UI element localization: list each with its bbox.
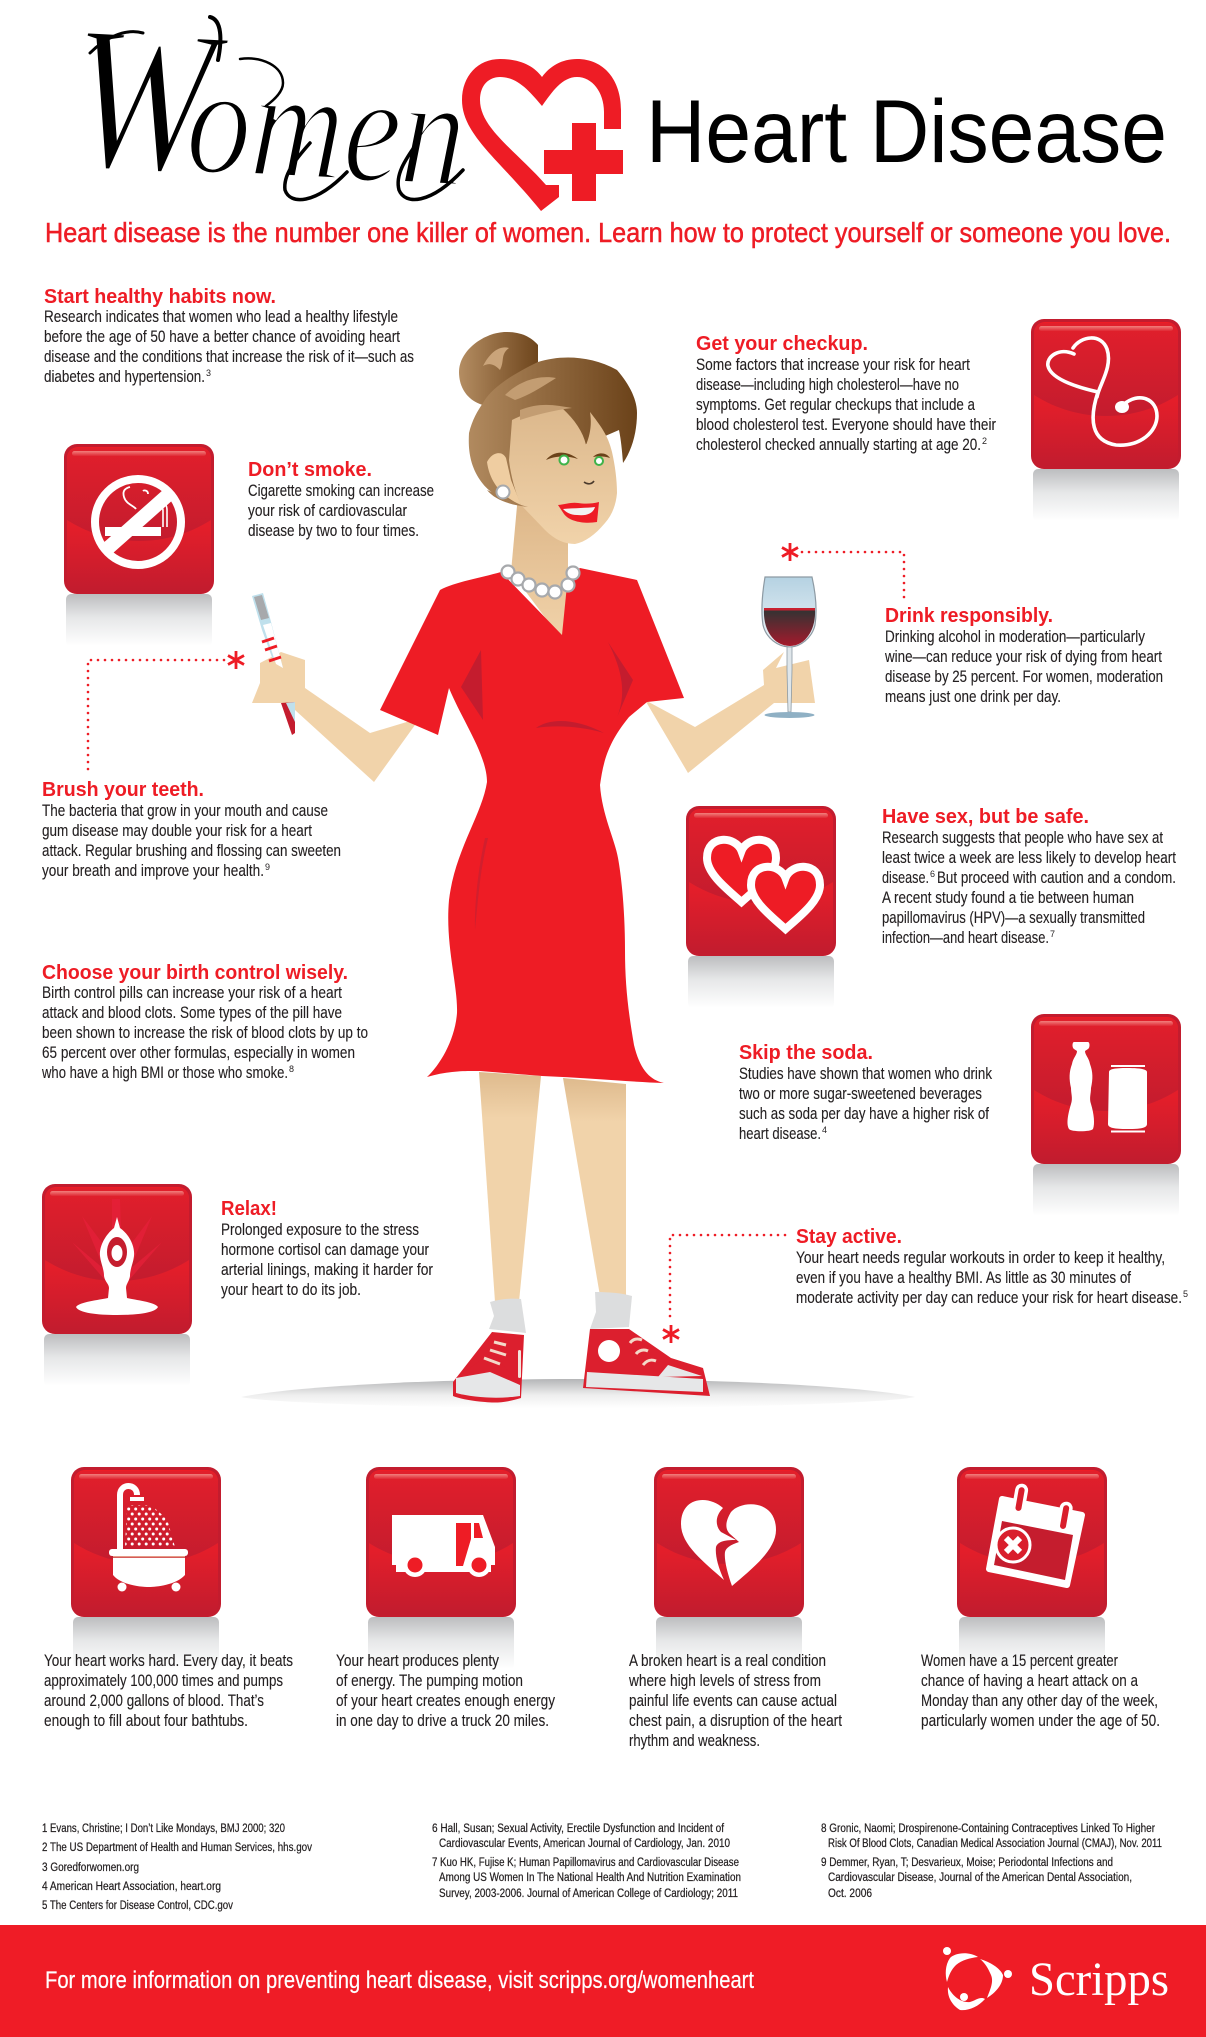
right arm and hand: [645, 652, 815, 773]
text block: relax: [221, 1198, 433, 1299]
text block: birth control: 8: [289, 1064, 294, 1074]
text block: birth control: [41, 962, 368, 1082]
fact: truck energy: [336, 1652, 556, 1730]
hair side lock: [487, 490, 528, 507]
text block: skip the soda: Skip the soda.: [739, 1042, 873, 1064]
nose: [584, 481, 594, 484]
left leg: [479, 1072, 541, 1302]
hair back: [469, 357, 637, 505]
text block: have sex: infection—and heart disease.: [882, 929, 1049, 947]
text block: drink responsibly: [884, 605, 1163, 706]
references: column 2: [432, 1823, 741, 1900]
text block: get your checkup: Get your checkup.: [696, 333, 868, 355]
text block: get your checkup: cholesterol checked annually starting at age 20.: [696, 436, 981, 454]
icon: no smoking: [64, 444, 214, 646]
fact: monday: particularly women under the age of 50.: [921, 1712, 1160, 1730]
text block: relax: Prolonged exposure to the stress: [221, 1221, 419, 1239]
fact: broken heart: where high levels of stress from: [628, 1672, 821, 1690]
toothbrush: [252, 593, 295, 735]
right leg: [563, 1078, 626, 1296]
fact: truck energy: Your heart produces plenty: [336, 1652, 500, 1670]
references: column 2: 7 Kuo HK, Fujise K; Human Papillomavirus and Cardiovascular Disease: [432, 1857, 739, 1869]
text block: get your checkup: disease—including high cholesterol—have no: [696, 376, 959, 394]
icon: delivery truck: [366, 1467, 516, 1669]
text block: brush your teeth: gum disease may double your risk for a heart: [42, 822, 312, 840]
text block: stay active: 5: [1183, 1289, 1188, 1299]
text block: get your checkup: [696, 333, 996, 454]
fact: broken heart: rhythm and weakness.: [629, 1732, 760, 1750]
text block: stay active: Stay active.: [796, 1226, 902, 1248]
references: column 1: 1 Evans, Christine; I Don’t Like Mondays, BMJ 2000; 320: [42, 1823, 285, 1835]
text block: have sex: disease.: [882, 869, 929, 887]
logo wordmark: Scripps: Scripps: [1029, 1953, 1169, 2006]
text block: relax: hormone cortisol can damage your: [221, 1241, 429, 1259]
text block: birth control: Choose your birth control wisely.: [42, 962, 348, 984]
left arm and hand: [252, 652, 420, 782]
text block: birth control: Birth control pills can increase your risk of a heart: [42, 984, 342, 1002]
icon: meditation: [42, 1184, 192, 1386]
fact: broken heart: painful life events can cause actual: [629, 1692, 837, 1710]
text block: dont smoke: Cigarette smoking can increase: [248, 482, 434, 500]
decorative swashes on script word: [90, 17, 463, 200]
text block: have sex: [882, 806, 1176, 947]
text block: brush your teeth: Brush your teeth.: [42, 779, 204, 801]
text block: start healthy habits: Start healthy habits now.: [44, 286, 276, 308]
text block: birth control: attack and blood clots. Some types of the pill have: [42, 1004, 342, 1022]
text block: dont smoke: your risk of cardiovascular: [248, 502, 407, 520]
text block: dont smoke: [248, 459, 434, 540]
right sock: [590, 1292, 632, 1329]
references: column 1: 3 Goredforwomen.org: [42, 1862, 139, 1874]
references: column 2: Among US Women In The National Health And Nutrition Examination: [439, 1872, 741, 1884]
text block: have sex: 6: [930, 869, 935, 879]
hair bun: [459, 332, 538, 406]
fact: broken heart: chest pain, a disruption of the heart: [629, 1712, 842, 1730]
icon: broken heart: [654, 1467, 804, 1669]
fact: truck energy: in one day to drive a truck 20 miles.: [336, 1712, 549, 1730]
text block: brush your teeth: The bacteria that grow in your mouth and cause: [42, 802, 328, 820]
references: column 2: Survey, 2003-2006. Journal of American College of Cardiology; 2011: [439, 1888, 738, 1900]
fact: bathtubs: around 2,000 gallons of blood. That’s: [44, 1692, 264, 1710]
title words: Heart Disease: Heart Disease: [646, 81, 1167, 181]
dress: [380, 568, 684, 1083]
text block: relax: arterial linings, making it harder for: [221, 1261, 433, 1279]
icon: two hearts: [686, 806, 836, 1008]
fact: bathtubs: enough to fill about four bathtubs.: [44, 1712, 248, 1730]
text block: get your checkup: blood cholesterol test. Everyone should have their: [696, 416, 996, 434]
text block: start healthy habits: 3: [206, 368, 211, 378]
callout connector: stay active: [663, 1235, 785, 1343]
icon: heart and cross logo: [462, 59, 623, 211]
text block: dont smoke: Don’t smoke.: [248, 459, 372, 481]
left shoe: [453, 1332, 524, 1403]
icon: shower and bathtub: [71, 1467, 221, 1669]
face: [509, 408, 617, 544]
neck: [511, 495, 568, 640]
fact: truck energy: of your heart creates enough energy: [336, 1692, 556, 1710]
necklace: [502, 566, 580, 598]
logo mark: Scripps: [943, 1947, 1012, 2010]
right shoe: [583, 1329, 710, 1396]
references: column 3: [821, 1823, 1162, 1900]
icon: soda bottle and can: [1031, 1014, 1181, 1216]
text block: skip the soda: two or more sugar-sweetened beverages: [739, 1085, 982, 1103]
references: column 2: 6 Hall, Susan; Sexual Activity, Erectile Dysfunction and Incident of: [432, 1823, 725, 1835]
text block: skip the soda: [739, 1042, 993, 1143]
text block: get your checkup: Some factors that increase your risk for heart: [696, 356, 970, 374]
references: column 3: 8 Gronic, Naomi; Drospirenone-Containing Contraceptives Linked To Higher: [821, 1823, 1155, 1835]
fact: monday: chance of having a heart attack on a: [921, 1672, 1139, 1690]
text block: brush your teeth: [42, 779, 341, 880]
right eye: [593, 453, 610, 465]
fact: monday: Monday than any other day of the week,: [921, 1692, 1158, 1710]
references: column 3: Cardiovascular Disease, Journal of the American Dental Association,: [828, 1872, 1132, 1884]
text block: have sex: Have sex, but be safe.: [882, 806, 1089, 828]
icon: calendar: [957, 1467, 1107, 1669]
callout connector: drink responsibly: [782, 543, 904, 600]
text block: get your checkup: 2: [982, 436, 987, 446]
text block: dont smoke: disease by two to four times.: [248, 522, 419, 540]
references: column 1: 5 The Centers for Disease Control, CDC.gov: [42, 1900, 233, 1912]
text block: start healthy habits: Research indicates that women who lead a healthy lifestyle: [44, 308, 398, 326]
fact: monday: [921, 1652, 1160, 1730]
text block: have sex: 7: [1050, 929, 1055, 939]
bun highlight: [483, 347, 509, 370]
text block: drink responsibly: Drinking alcohol in moderation—particularly: [885, 628, 1146, 646]
text block: start healthy habits: before the age of 50 have a better chance of avoiding heart: [44, 328, 400, 346]
fact: bathtubs: approximately 100,000 times and pumps: [44, 1672, 283, 1690]
wine glass: [762, 577, 816, 718]
fact: broken heart: A broken heart is a real condition: [629, 1652, 826, 1670]
mouth: [558, 502, 599, 523]
ear: [487, 453, 521, 505]
text block: relax: Relax!: [221, 1198, 277, 1220]
text block: get your checkup: symptoms. Get regular checkups that include a: [696, 396, 976, 414]
ground shadow: [241, 1379, 915, 1408]
text block: have sex: papillomavirus (HPV)—a sexually transmitted: [882, 909, 1145, 927]
text block: drink responsibly: Drink responsibly.: [885, 605, 1053, 627]
text block: start healthy habits: [44, 286, 414, 386]
earring: [496, 486, 510, 498]
fringe highlight: [505, 377, 572, 420]
text block: brush your teeth: 9: [265, 862, 270, 872]
fact: truck energy: of energy. The pumping motion: [336, 1672, 523, 1690]
references: column 1: 2 The US Department of Health and Human Services, hhs.gov: [42, 1842, 312, 1854]
text block: skip the soda: heart disease.: [739, 1125, 821, 1143]
text block: stay active: even if you have a healthy BMI. As little as 30 minutes of: [796, 1269, 1131, 1287]
icon: stethoscope: [1031, 319, 1181, 521]
callout connector: brush your teeth: [88, 651, 244, 773]
references: column 3: 9 Demmer, Ryan, T; Desvarieux, Moise; Periodontal Infections and: [821, 1857, 1113, 1869]
title: [66, 0, 1167, 230]
references: column 1: 4 American Heart Association, heart.org: [42, 1881, 221, 1893]
text block: brush your teeth: your breath and improve your health.: [42, 862, 264, 880]
text block: birth control: 65 percent over other formulas, especially in women: [42, 1044, 355, 1062]
text block: birth control: who have a high BMI or those who smoke.: [41, 1064, 288, 1082]
references: column 3: Oct. 2006: [828, 1888, 872, 1900]
text block: start healthy habits: diabetes and hypertension.: [44, 368, 205, 386]
text block: skip the soda: Studies have shown that women who drink: [739, 1065, 993, 1083]
text block: have sex: A recent study found a tie between human: [882, 889, 1134, 907]
text block: relax: your heart to do its job.: [221, 1281, 361, 1299]
illustration: woman: [252, 332, 816, 1403]
text block: start healthy habits: disease and the conditions that increase the risk of it—such as: [44, 348, 414, 366]
text block: birth control: been shown to increase the risk of blood clots by up to: [42, 1024, 368, 1042]
fact: broken heart: [628, 1652, 842, 1750]
left eye: [546, 453, 578, 464]
fact: bathtubs: Your heart works hard. Every day, it beats: [44, 1652, 293, 1670]
fact: bathtubs: [44, 1652, 293, 1730]
footer call to action: For more information on preventing heart disease, visit scripps.org/womenheart: [45, 1967, 754, 1994]
references: column 2: Cardiovascular Events, American Journal of Cardiology, Jan. 2010: [439, 1838, 730, 1850]
references: column 1: [42, 1823, 312, 1912]
fact: monday: Women have a 15 percent greater: [921, 1652, 1118, 1670]
text block: drink responsibly: means just one drink per day.: [885, 688, 1061, 706]
left sock: [489, 1299, 526, 1333]
text block: stay active: [796, 1226, 1188, 1307]
text block: skip the soda: such as soda per day have a higher risk of: [739, 1105, 989, 1123]
text block: brush your teeth: attack. Regular brushing and flossing can sweeten: [42, 842, 341, 860]
footer band: [0, 1925, 1206, 2037]
text block: skip the soda: 4: [822, 1125, 827, 1135]
